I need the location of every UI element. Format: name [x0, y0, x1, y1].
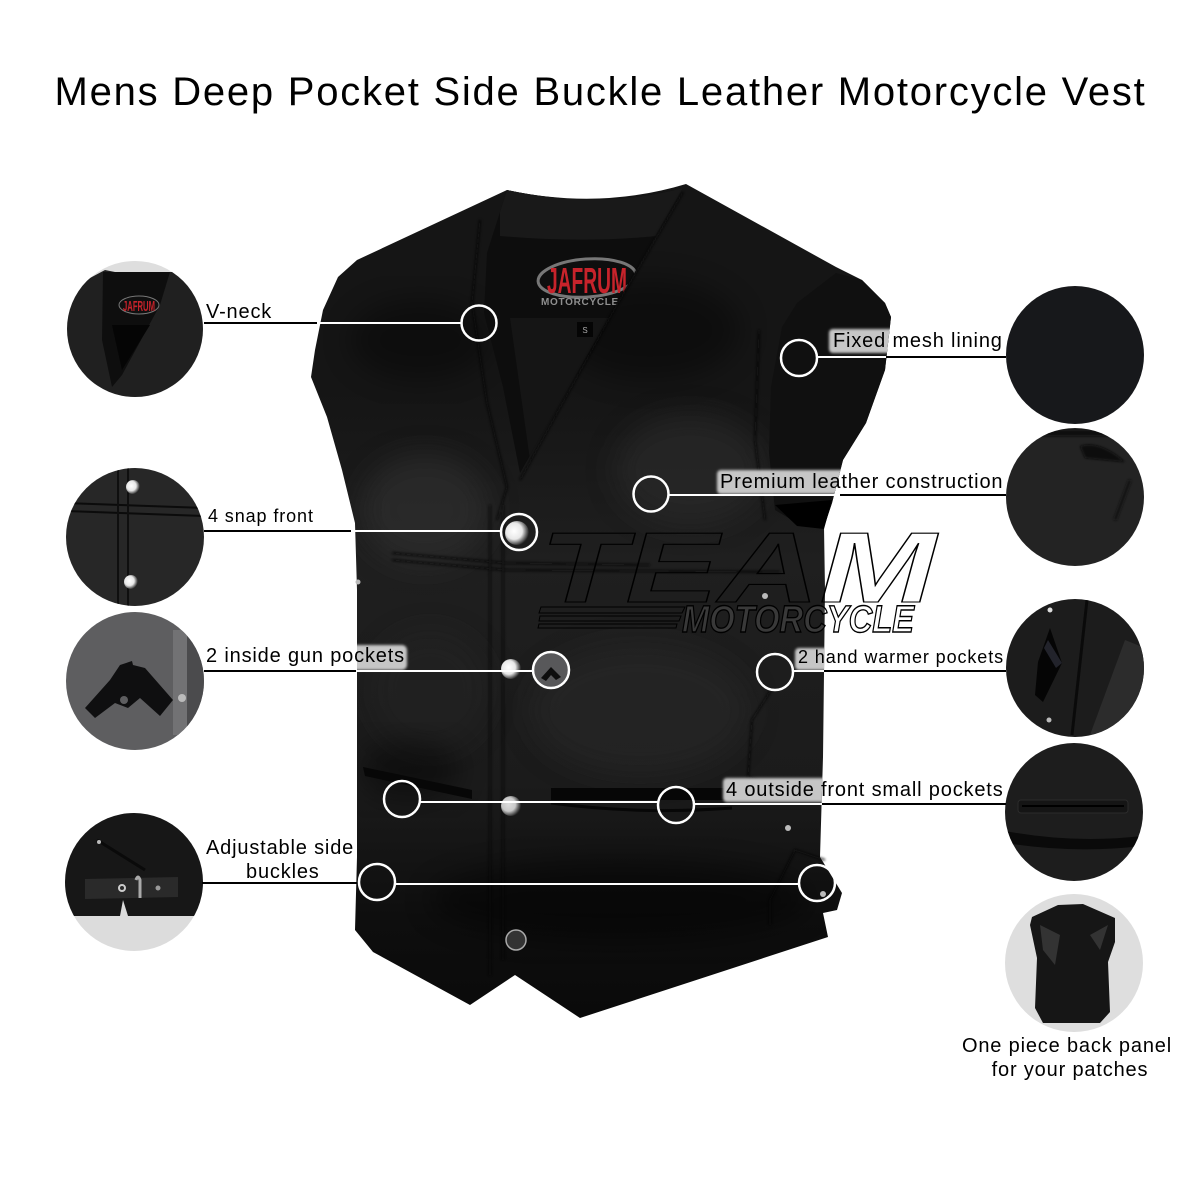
callout: 4 outside front small pockets [384, 740, 1150, 885]
callout: 4 snap front [60, 465, 537, 610]
photo circle [65, 813, 203, 951]
side details [356, 580, 826, 897]
vest photo [311, 184, 891, 1018]
watermark: TEAM [540, 512, 940, 624]
callout: 2 hand warmer pockets [757, 595, 1150, 740]
watermark [538, 512, 940, 641]
photo circle [66, 468, 204, 606]
callout: Adjustable side buckles: buckles [246, 861, 320, 883]
photo circle: JAFRUM [123, 298, 155, 315]
callout: One piece back panel [962, 894, 1172, 1081]
photo circle [1006, 428, 1144, 566]
vest body [311, 184, 891, 1018]
photo circle [1006, 599, 1144, 737]
brand label: MOTORCYCLE C [541, 297, 630, 308]
callout: 2 inside gun pockets [60, 610, 569, 755]
watermark: MOTORCYCLE [682, 599, 915, 641]
armhole shadow [775, 500, 832, 529]
armhole mesh [769, 273, 891, 527]
callout: Adjustable side buckles: Adjustable side [206, 837, 354, 859]
inner lining [484, 188, 683, 473]
callout: 4 snap front: 4 snap front [208, 506, 314, 526]
callout: 2 inside gun pockets: 2 inside gun pockets [206, 645, 405, 667]
snaps [505, 521, 529, 545]
right pocket [551, 788, 733, 800]
brand label: JAFRUM [547, 260, 627, 301]
callout: V-neck: V-neck [206, 301, 272, 323]
callout: Adjustable side buckles [60, 810, 835, 955]
callout: 2 hand warmer pockets: 2 hand warmer pockets [798, 647, 1004, 667]
photo circle [67, 261, 203, 397]
left pocket [363, 767, 472, 799]
photo circle [1005, 743, 1143, 881]
callout: V-neck [60, 260, 496, 400]
photo circle [1005, 894, 1143, 1032]
label halos on vest [340, 329, 929, 802]
callout: Fixed mesh lining [781, 286, 1144, 424]
back vest thumbnail [1030, 904, 1115, 1023]
callout: One piece back panel: One piece back panel [962, 1035, 1172, 1057]
photo circle [1006, 286, 1144, 424]
callout: 4 outside front small pockets: 4 outside front small pockets [726, 779, 1004, 801]
callout: Premium leather construction [634, 425, 1150, 570]
callout: One piece back panel: for your patches [992, 1059, 1148, 1081]
callout: Fixed mesh lining: Fixed mesh lining [833, 330, 1003, 352]
callout: Premium leather construction: Premium leather construction [720, 471, 1003, 493]
icon: pistol [85, 661, 173, 718]
right pocket lower welt [551, 803, 732, 811]
photo circle [66, 612, 204, 750]
title: Mens Deep Pocket Side Buckle Leather Motorcycle Vest [54, 70, 1147, 114]
brand label: S [582, 326, 588, 335]
lining collar and lower panel [500, 186, 690, 460]
seams [392, 192, 825, 975]
brand label [537, 256, 637, 337]
leather shading [350, 280, 810, 940]
